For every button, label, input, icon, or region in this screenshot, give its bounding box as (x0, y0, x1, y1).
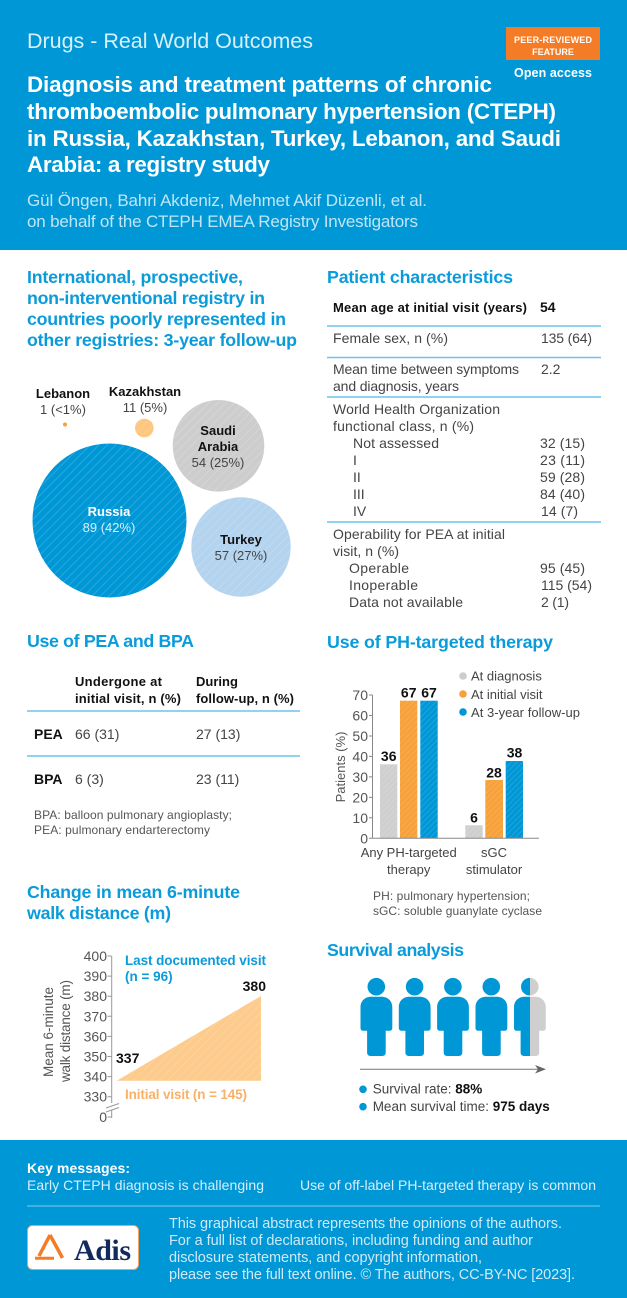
bar chart: 0 (360, 830, 368, 846)
area chart: 340 (84, 1069, 107, 1085)
bubble chart: patients by country (32, 384, 291, 598)
chart legend (459, 668, 580, 720)
row: operability: visit, n (%) (333, 543, 399, 559)
row: PEA (34, 726, 240, 742)
bar chart: 36 (381, 748, 397, 764)
area chart: Mean 6-minute (41, 987, 56, 1077)
bubble: Saudi Arabia (173, 400, 264, 492)
abbreviations: BPA: balloon pulmonary angioplasty; (34, 808, 232, 822)
bubble: Saudi Arabia: Arabia (198, 439, 239, 454)
area chart: 390 (84, 968, 107, 984)
bar chart (333, 684, 539, 877)
bar chart: 10 (352, 810, 368, 826)
area chart: (n = 96) (125, 969, 173, 984)
row: WHO functional class (333, 401, 585, 519)
row: WHO functional class: I (353, 452, 357, 468)
bubble: Turkey: Turkey (220, 532, 263, 547)
bubble: Lebanon (36, 386, 90, 426)
survival results: Survival rate: 88% (373, 1082, 482, 1096)
area chart: walk distance (m) (58, 980, 73, 1083)
chart legend: At 3-year follow-up (471, 705, 580, 720)
key messages: Use of off-label PH-targeted therapy is common (300, 1177, 596, 1193)
bubble: Lebanon: 1 (<1%) (40, 402, 86, 417)
area chart: 360 (84, 1028, 107, 1044)
heading: registry description (27, 267, 297, 350)
row: PEA: 27 (13) (196, 726, 240, 742)
disclaimer: For a full list of declarations, including funding and author (169, 1233, 533, 1249)
bubble: Kazakhstan: 11 (5%) (123, 400, 167, 415)
area chart: 350 (84, 1048, 107, 1064)
chart abbreviations: PH: pulmonary hypertension; (373, 889, 530, 903)
header banner (0, 0, 627, 250)
bubble: Turkey: 57 (27%) (215, 548, 267, 563)
bubble: Kazakhstan: Kazakhstan (109, 384, 181, 399)
bar chart: therapy (387, 862, 431, 877)
heading: patient characteristics: Patient characteristics (327, 267, 513, 287)
row: WHO functional class: 32 (15) (540, 435, 585, 451)
survival results: Mean survival time: 975 days (373, 1099, 550, 1114)
bar chart: 40 (352, 748, 368, 764)
abbreviations (34, 808, 232, 837)
row: operability: 115 (54) (541, 577, 592, 593)
row: mean age: 54 (540, 299, 556, 315)
bar chart: 70 (352, 687, 368, 703)
heading: survival analysis: Survival analysis (327, 940, 464, 960)
bar chart: 67 (401, 684, 417, 700)
open access label: Open access (514, 66, 592, 80)
bubble: Saudi Arabia: Saudi (200, 423, 236, 438)
disclaimer: This graphical abstract represents the opinions of the authors. (169, 1216, 562, 1232)
heading: walk distance: Change in mean 6-minute (27, 882, 240, 902)
row: operability: Operability for PEA at initial (333, 526, 505, 542)
disclaimer: disclosure statements, and copyright information, (169, 1250, 482, 1266)
arrow: time axis (360, 1065, 546, 1074)
footer banner (0, 1140, 627, 1298)
heading: walk distance (26, 882, 240, 923)
chart abbreviations: sGC: soluble guanylate cyclase (373, 904, 542, 918)
panel: PH-targeted therapy (327, 632, 580, 918)
peer-reviewed badge: FEATURE (532, 47, 574, 57)
table header (75, 674, 294, 706)
row: operability (333, 526, 592, 610)
panel: use of PEA and BPA (27, 631, 300, 837)
bar chart: 6 (470, 810, 478, 826)
area chart: 380 (84, 988, 107, 1004)
bubble: Russia: Russia (88, 504, 131, 519)
heading: registry description: non-interventional registry in (27, 288, 265, 308)
journal name: Drugs - Real World Outcomes (27, 29, 313, 53)
row: BPA (34, 771, 239, 787)
area chart: 400 (84, 948, 107, 964)
area chart (41, 948, 266, 1125)
heading: use of PEA and BPA: Use of PEA and BPA (27, 631, 194, 651)
area chart: 0 (99, 1109, 107, 1125)
article title: in Russia, Kazakhstan, Turkey, Lebanon, and Saudi (27, 126, 561, 151)
row: mean age: Mean age at initial visit (years) (333, 300, 527, 315)
peer-reviewed badge (506, 27, 600, 60)
article title: thromboembolic pulmonary hypertension (CTEPH) (27, 99, 556, 124)
bar chart: 67 (421, 684, 437, 700)
article title: Arabia: a registry study (27, 152, 271, 177)
row: WHO functional class: 23 (11) (540, 452, 585, 468)
authors: Gül Öngen, Bahri Akdeniz, Mehmet Akif Düzenli, et al. (27, 191, 427, 210)
article title (27, 72, 561, 177)
area chart: 330 (84, 1089, 107, 1105)
area chart: Initial visit (n = 145) (125, 1087, 247, 1102)
Adis logo (28, 1226, 138, 1270)
bubble: Saudi Arabia: 54 (25%) (192, 455, 244, 470)
panel: patient characteristics (327, 267, 601, 610)
row: operability: 95 (45) (540, 560, 585, 576)
heading: registry description: International, prospective, (27, 267, 243, 287)
article title: Diagnosis and treatment patterns of chronic (27, 72, 492, 97)
area chart: 380 (243, 978, 266, 994)
row: time to diagnosis: 2.2 (541, 361, 561, 377)
key messages: Early CTEPH diagnosis is challenging (27, 1177, 264, 1193)
heading: PH-targeted therapy: Use of PH-targeted therapy (327, 632, 553, 652)
area chart: Last documented visit (125, 953, 266, 968)
heading: registry description: other registries: 3-year follow-up (27, 330, 297, 350)
heading: registry description: countries poorly represented in (27, 309, 286, 329)
disclaimer (169, 1216, 575, 1283)
bubble: Lebanon: Lebanon (36, 386, 90, 401)
table header: During (196, 674, 238, 689)
table header: Undergone at (75, 674, 163, 689)
bar chart: 30 (352, 769, 368, 785)
chart legend: At diagnosis (471, 668, 542, 684)
bar chart: 28 (486, 764, 502, 780)
row: female sex: 135 (64) (541, 330, 592, 346)
abbreviations: PEA: pulmonary endarterectomy (34, 823, 210, 837)
bubble: Russia (32, 444, 186, 598)
row: BPA: BPA (34, 771, 63, 787)
bar chart: Any PH-targeted (361, 845, 457, 860)
bubble: Kazakhstan (109, 384, 181, 437)
row: time to diagnosis: and diagnosis, years (333, 378, 459, 394)
row: operability: 2 (1) (541, 594, 569, 610)
bar chart: 20 (352, 789, 368, 805)
row: WHO functional class: Not assessed (353, 435, 439, 451)
icon: people pictogram (360, 978, 546, 1056)
bar chart: sGC (481, 845, 507, 860)
row: time to diagnosis: Mean time between symptoms (333, 361, 519, 377)
key messages (27, 1160, 596, 1193)
bar chart: 50 (352, 728, 368, 744)
row: BPA: 23 (11) (196, 771, 239, 787)
table header: follow-up, n (%) (196, 691, 294, 706)
authors: on behalf of the CTEPH EMEA Registry Investigators (27, 212, 418, 231)
row: PEA: PEA (34, 726, 63, 742)
bar chart: stimulator (466, 862, 523, 877)
row: WHO functional class: World Health Organization (333, 401, 500, 417)
row: WHO functional class: functional class, n (%) (333, 418, 474, 434)
panel: survival analysis (327, 940, 550, 1114)
bar chart: 38 (507, 744, 522, 760)
row: WHO functional class: II (353, 469, 361, 485)
row: WHO functional class: 84 (40) (540, 486, 585, 502)
row: WHO functional class: 14 (7) (541, 503, 578, 519)
peer-reviewed badge: PEER-REVIEWED (514, 35, 592, 45)
bar chart: 60 (352, 708, 368, 724)
row: WHO functional class: 59 (28) (540, 469, 585, 485)
survival results (359, 1082, 550, 1114)
chart abbreviations (373, 889, 542, 918)
row: PEA: 66 (31) (75, 726, 119, 742)
bubble: Turkey (191, 497, 291, 597)
area chart: 370 (84, 1008, 107, 1024)
key messages: Key messages: (27, 1160, 130, 1176)
row: WHO functional class: IV (353, 503, 367, 519)
Adis logo: Adis (74, 1234, 131, 1267)
disclaimer: please see the full text online. © The authors, CC-BY-NC [2023]. (169, 1267, 575, 1283)
row: WHO functional class: III (353, 486, 365, 502)
bubble: Russia: 89 (42%) (83, 520, 135, 535)
row: time to diagnosis (333, 361, 561, 394)
chart legend: At initial visit (471, 687, 543, 702)
row: BPA: 6 (3) (75, 771, 104, 787)
area chart: 337 (116, 1050, 140, 1066)
heading: walk distance: walk distance (m) (26, 903, 171, 923)
row: operability: Operable (349, 560, 409, 576)
authors (27, 191, 427, 231)
panel: 6-minute walk distance (26, 882, 266, 1125)
row: female sex: Female sex, n (%) (333, 330, 448, 346)
table header: initial visit, n (%) (75, 691, 181, 706)
row: female sex (333, 330, 592, 346)
row: operability: Data not available (349, 594, 463, 610)
bar chart: Patients (%) (333, 732, 348, 802)
row: operability: Inoperable (349, 577, 418, 593)
